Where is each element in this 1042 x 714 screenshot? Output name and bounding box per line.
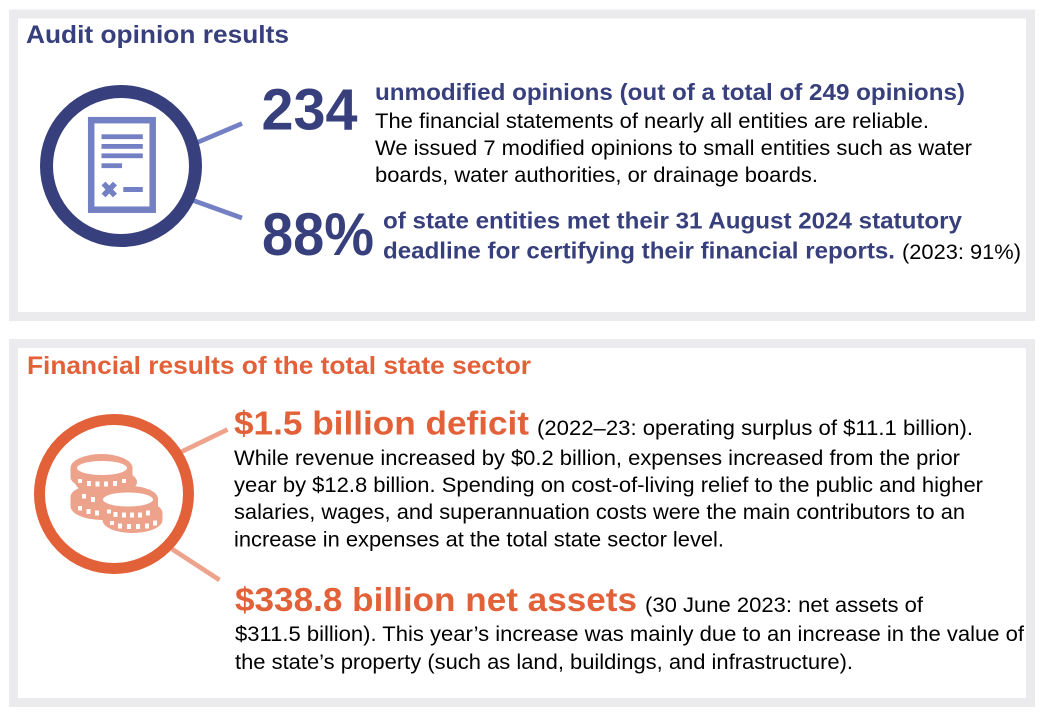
panel: financial results — [14, 344, 1030, 702]
heading: financial results of the total state sector: Financial results of the total state sector — [27, 352, 531, 380]
text: deficit: salaries, wages, and superannuation costs were the main contributors to an — [234, 501, 965, 524]
text: deficit: While revenue increased by $0.2 billion, expenses increased from the prior — [234, 447, 960, 470]
text: unmodified opinions: boards, water authorities, or drainage boards. — [375, 164, 818, 187]
text: deficit: increase in expenses at the total state sector level. — [234, 528, 724, 552]
stat: 88%: 88% — [262, 201, 374, 268]
text: statutory deadline: (2023: 91%) — [902, 241, 1021, 264]
text: net assets: (30 June 2023: net assets of — [645, 594, 923, 617]
text: net assets — [235, 581, 1024, 674]
stat: 234: 234 — [262, 78, 358, 142]
text: deficit: year by $12.8 billion. Spending on cost-of-living relief to the public and higher — [234, 474, 983, 497]
text: statutory deadline: of state entities met their 31 August 2024 statutory — [383, 208, 962, 234]
icon: coins in circle — [40, 420, 188, 568]
connector lines: audit — [192, 124, 242, 218]
icon: document in circle — [46, 92, 196, 240]
text: deficit: $1.5 billion deficit — [234, 404, 529, 442]
text: net assets: $311.5 billion). This year’s increase was mainly due to an increase in the value of — [235, 623, 1024, 646]
panel: audit opinion results — [14, 14, 1030, 316]
connector lines: financial — [172, 430, 228, 580]
coin details — [77, 461, 157, 529]
text: net assets: $338.8 billion net assets — [235, 581, 637, 618]
coin silhouettes — [70, 454, 162, 533]
text: unmodified opinions — [375, 79, 972, 187]
text: deficit: (2022–23: operating surplus of $11.1 billion). — [537, 417, 973, 440]
heading: audit opinion results: Audit opinion results — [26, 21, 289, 49]
text: statutory deadline: deadline for certifying their financial reports. — [383, 238, 895, 264]
text: unmodified opinions: We issued 7 modified opinions to small entities such as water — [375, 137, 972, 160]
text: statutory deadline — [383, 208, 1021, 264]
text: deficit — [234, 404, 983, 552]
text: unmodified opinions: unmodified opinions (out of a total of 249 opinions) — [375, 79, 965, 105]
text: net assets: the state’s property (such as land, buildings, and infrastructure). — [235, 651, 853, 674]
text: unmodified opinions: The financial statements of nearly all entities are reliable. — [375, 110, 929, 133]
